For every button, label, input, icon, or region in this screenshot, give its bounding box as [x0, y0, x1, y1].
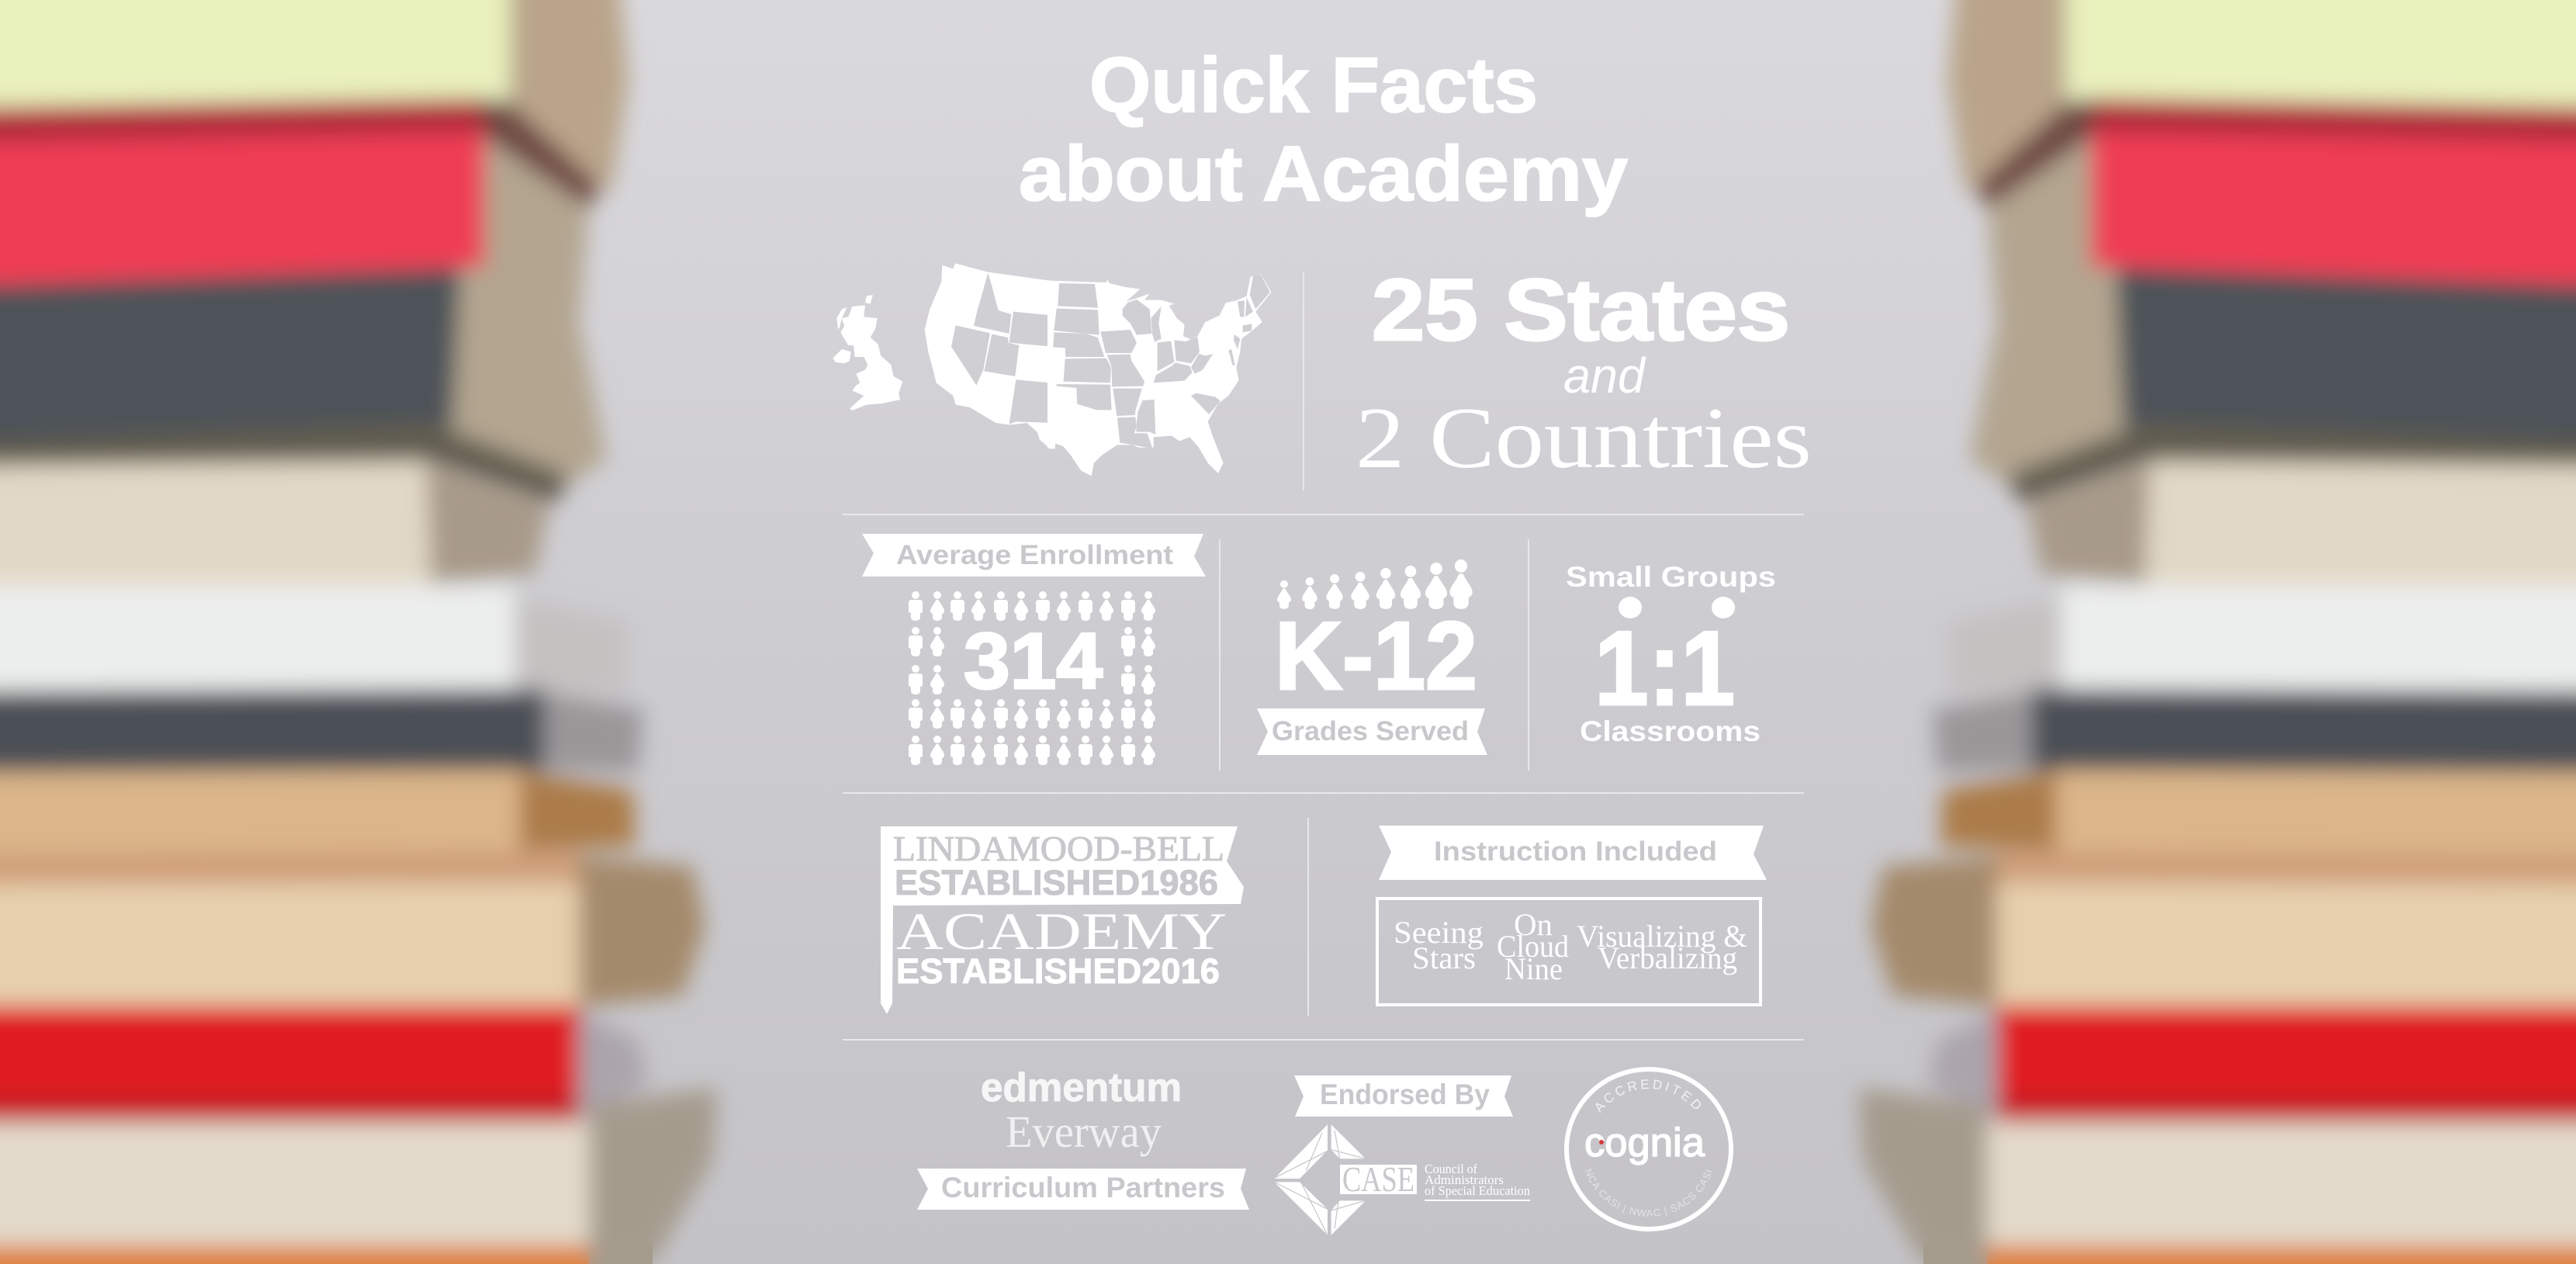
icon: flag	[881, 826, 1244, 1014]
icon: western United States	[925, 263, 1055, 448]
ribbon: grades served: Grades Served	[1272, 716, 1469, 746]
title	[1019, 42, 1628, 217]
panel: established flag	[881, 826, 1244, 1014]
panel: established flag: ESTABLISHED2016	[896, 951, 1220, 991]
icon: UK and US map	[833, 263, 1271, 476]
text: programs: Nine	[1504, 951, 1563, 986]
number: 314: 314	[964, 617, 1103, 705]
logo: CASE wordmark: CASE	[1342, 1160, 1414, 1199]
panel: grades served	[1257, 559, 1487, 755]
badge: Cognia accredited	[1564, 1067, 1733, 1231]
text: programs: Verbalizing	[1598, 940, 1737, 975]
ribbon: endorsed by	[1294, 1075, 1513, 1117]
ribbon: average enrollment	[862, 534, 1206, 577]
logo: edmentum: edmentum	[981, 1065, 1182, 1110]
panel: small groups 1:1 classrooms: 1:1	[1594, 609, 1735, 727]
text: programs: Cloud	[1497, 929, 1569, 964]
panel: small groups 1:1 classrooms: Classrooms	[1580, 715, 1761, 747]
logo: CASE wordmark: Administrators	[1425, 1172, 1504, 1187]
ribbon: curriculum partners: Curriculum Partners	[941, 1172, 1225, 1203]
text: programs: Stars	[1412, 940, 1476, 975]
panel: instruction included	[1377, 826, 1767, 1005]
ribbon: instruction included	[1379, 826, 1767, 880]
panel: small groups 1:1 classrooms: Small Groups	[1566, 561, 1776, 593]
panel: established flag: ACADEMY	[896, 902, 1227, 961]
icon: eastern United States	[1047, 274, 1271, 476]
logo: CASE wordmark: of Special Education	[1425, 1183, 1530, 1198]
text: programs	[1394, 907, 1747, 986]
icon: growing students	[1277, 559, 1473, 609]
heading: 25 States and 2 Countries: 25 States	[1372, 261, 1790, 358]
left book stack	[0, 0, 718, 1264]
panel: established flag: LINDAMOOD-BELL	[893, 829, 1224, 868]
text: programs: On	[1514, 907, 1553, 942]
panel: endorsed by	[1274, 1075, 1530, 1235]
panel: curriculum partners	[917, 1065, 1249, 1210]
logo: CASE diamond	[1274, 1124, 1366, 1235]
ribbon: endorsed by: Endorsed By	[1320, 1079, 1490, 1110]
logo: CASE wordmark	[1340, 1160, 1530, 1201]
ribbon: instruction included: Instruction Included	[1434, 836, 1717, 867]
heading: 25 States and 2 Countries: 2 Countries	[1356, 390, 1812, 487]
divider	[1303, 272, 1304, 490]
icon: heads over 1:1	[1619, 597, 1735, 618]
badge: Cognia accredited: ACCREDITED	[1595, 1079, 1701, 1113]
badge: Cognia accredited: cognia	[1584, 1120, 1705, 1165]
logo: CASE wordmark: Council of	[1425, 1162, 1477, 1176]
panel: established flag: ESTABLISHED1986	[895, 863, 1218, 902]
icon: United Kingdom	[833, 295, 902, 410]
heading: 25 States and 2 Countries: and	[1563, 348, 1646, 403]
number: K-12: K-12	[1275, 603, 1477, 710]
heading: 25 States and 2 Countries	[1356, 261, 1812, 487]
panel: small groups 1:1 classrooms	[1566, 561, 1776, 747]
box: programs	[1377, 899, 1761, 1005]
ribbon: average enrollment: Average Enrollment	[896, 540, 1173, 570]
icon: rows of people	[909, 591, 1155, 765]
badge: Cognia accredited: NCA CASI | NWAC | SACS CASI	[1584, 1169, 1712, 1217]
ribbon: grades served	[1257, 708, 1487, 755]
logo: Everway: Everway	[1006, 1106, 1162, 1157]
title: about Academy	[1019, 130, 1628, 217]
panel: average enrollment	[862, 534, 1206, 765]
text: programs: Visualizing &	[1577, 919, 1747, 954]
right book stack	[1858, 0, 2576, 1264]
ribbon: curriculum partners	[917, 1169, 1249, 1210]
title: Quick Facts	[1089, 42, 1538, 129]
text: programs: Seeing	[1394, 915, 1484, 950]
